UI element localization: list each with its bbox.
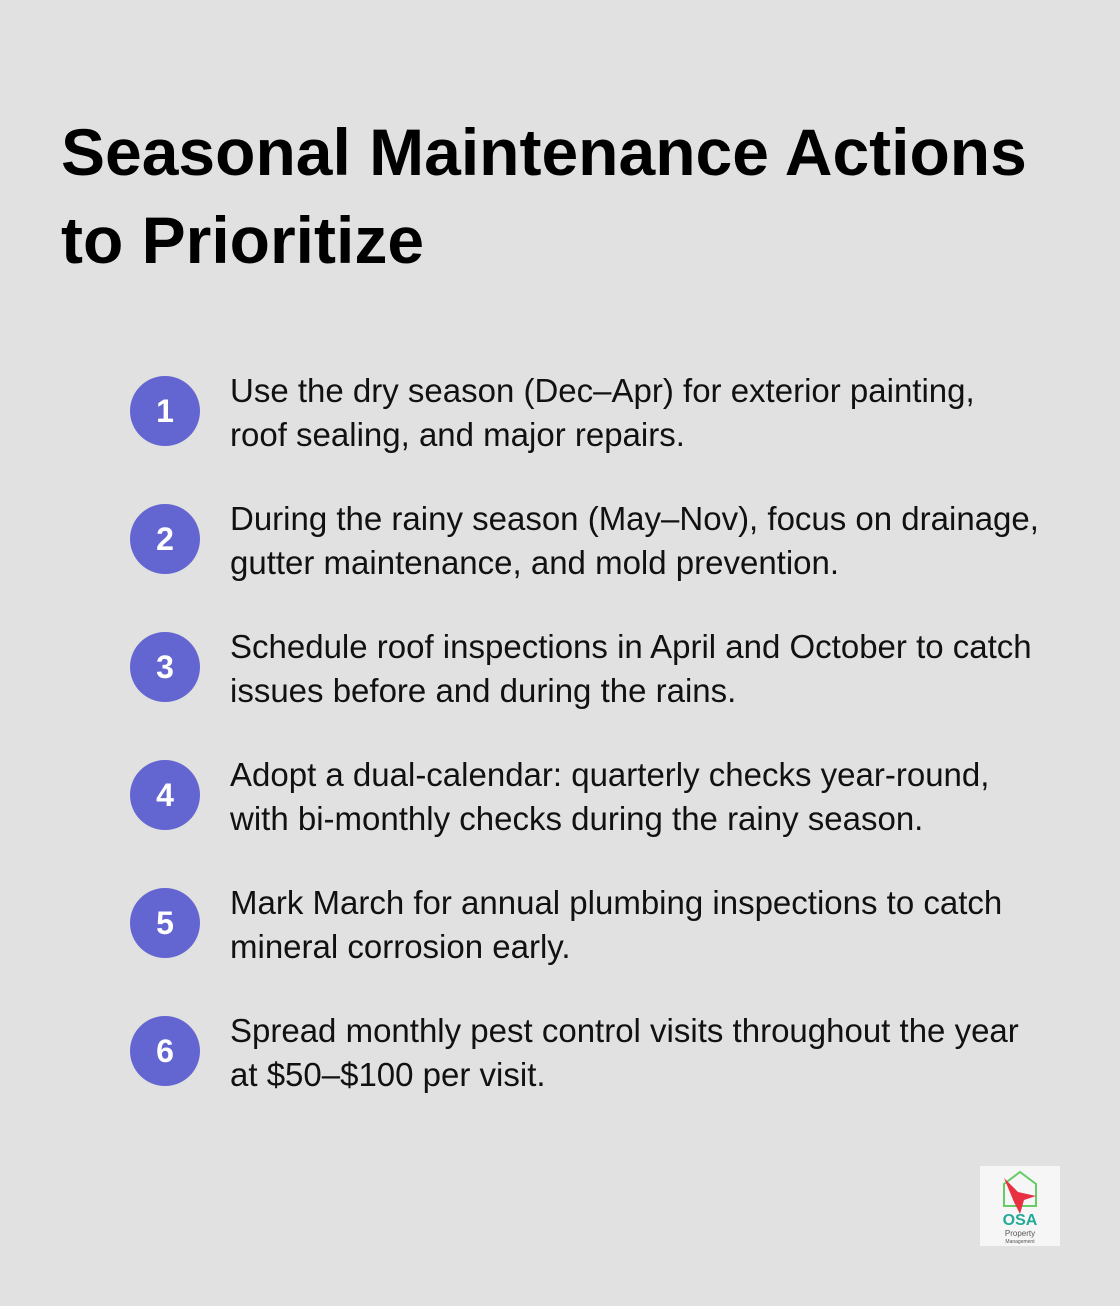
item 4 [130,756,989,837]
item 6: at $50–$100 per visit. [230,1056,546,1093]
item 5: mineral corrosion early. [230,928,571,965]
item 3: Schedule roof inspections in April and October to catch [230,628,1032,665]
logo: Management [1005,1239,1035,1245]
item 3: 3 [156,649,174,685]
logo: Property [1005,1229,1035,1238]
item 2: gutter maintenance, and mold prevention. [230,544,839,581]
item 4: 4 [156,777,174,813]
item 3: issues before and during the rains. [230,672,736,709]
item 2: During the rainy season (May–Nov), focus on drainage, [230,500,1039,537]
title: Seasonal Maintenance Actions [61,115,1027,189]
title: to Prioritize [61,203,424,277]
item 4: Adopt a dual-calendar: quarterly checks year-round, [230,756,989,793]
item 3 [130,628,1032,709]
item 1 [130,372,975,453]
logo [980,1166,1060,1246]
item 4: with bi-monthly checks during the rainy season. [230,800,923,837]
item 5: Mark March for annual plumbing inspections to catch [230,884,1002,921]
logo: OSA [1003,1212,1038,1229]
item 2 [130,500,1039,581]
item 1: 1 [156,393,174,429]
item 6: Spread monthly pest control visits throughout the year [230,1012,1019,1049]
item 5 [130,884,1002,965]
item 1: roof sealing, and major repairs. [230,416,685,453]
item 2: 2 [156,521,174,557]
item 6: 6 [156,1033,174,1069]
title [61,115,1027,277]
item 6 [130,1012,1019,1093]
item 5: 5 [156,905,174,941]
item 1: Use the dry season (Dec–Apr) for exterior painting, [230,372,975,409]
